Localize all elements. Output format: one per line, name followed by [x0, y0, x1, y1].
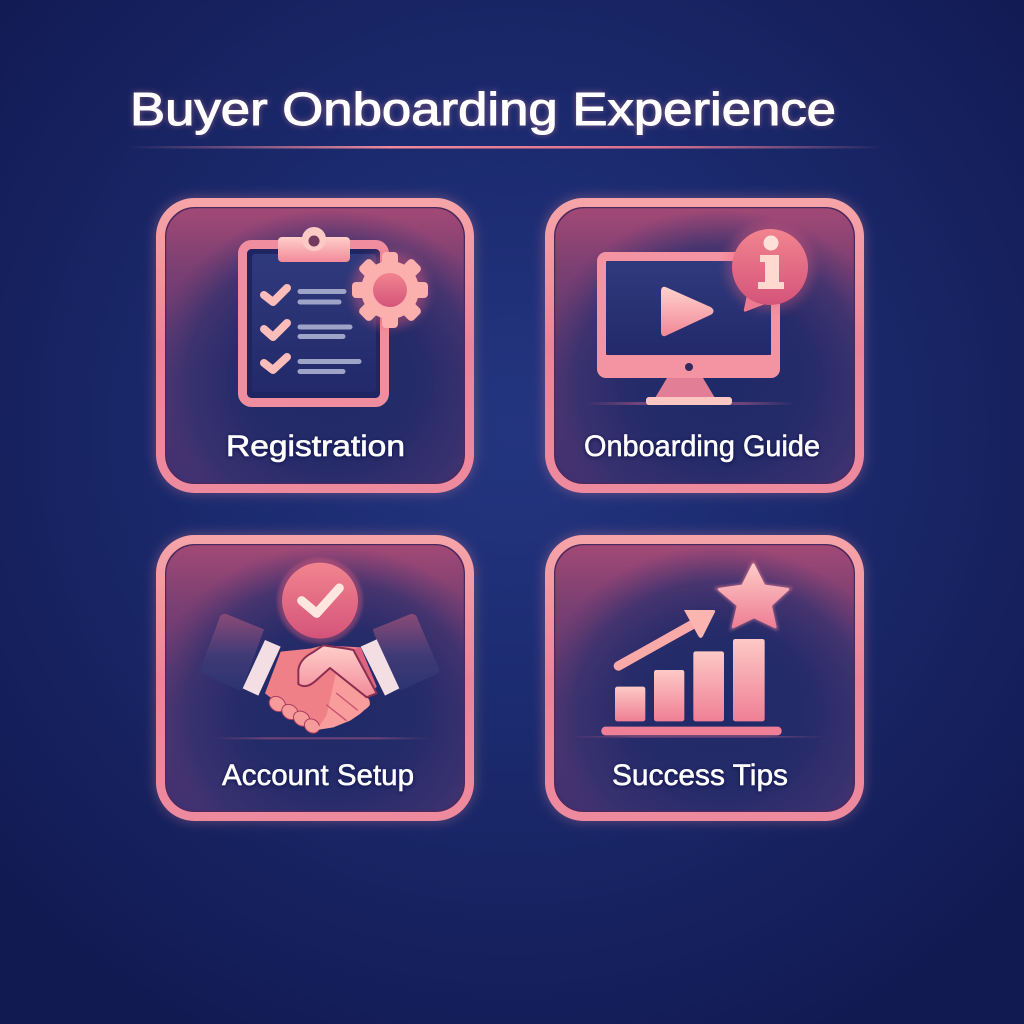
label: onboarding guide: Onboarding Guide: [584, 430, 820, 463]
icon: growth chart with star: [570, 565, 827, 738]
label: registration: Registration: [226, 430, 405, 463]
label: account setup: Account Setup: [222, 759, 414, 792]
icon: monitor with play button and info bubble: [585, 223, 814, 405]
icon: clipboard with gear: [242, 227, 428, 402]
panel: success tips: [550, 540, 860, 816]
icon: handshake with check badge: [200, 558, 439, 739]
title: Buyer Onboarding Experience: [130, 83, 836, 135]
panel: account setup: [160, 540, 470, 816]
panel: registration: [160, 202, 470, 488]
panel: onboarding guide: [550, 202, 860, 488]
label: success tips: Success Tips: [612, 759, 788, 792]
